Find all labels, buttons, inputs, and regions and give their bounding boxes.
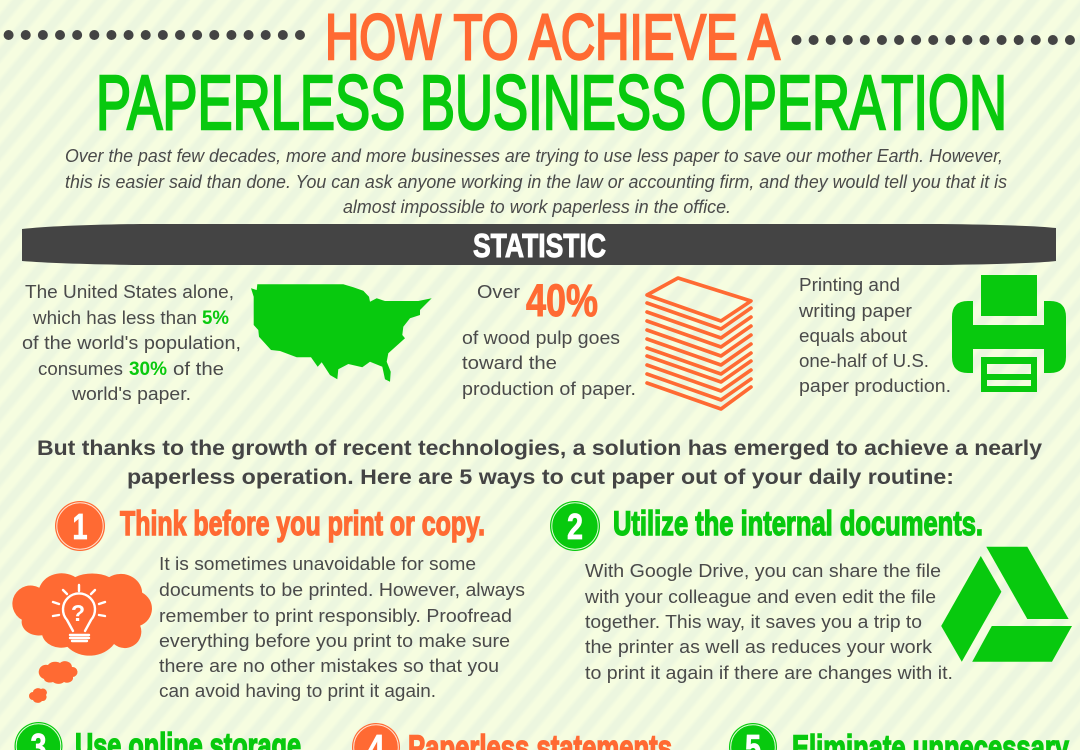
transition text <box>37 437 1042 489</box>
step 1 body: documents to be printed. However, always <box>159 579 525 600</box>
stat text: United States: 5% <box>202 308 229 329</box>
stat text: United States: world's paper. <box>71 383 191 404</box>
stat text: printing paper: equals about <box>799 325 907 346</box>
title line 1: HOW TO ACHIEVE A <box>325 1 780 73</box>
step 2 body: with your colleague and even edit the file <box>584 586 936 607</box>
stat text: United States: 30% <box>129 359 167 380</box>
step 1 badge: 1 <box>72 506 88 547</box>
left dotted line <box>9 30 300 40</box>
step 2 <box>550 501 1072 683</box>
step 1 body: remember to print responsibly. Proofread <box>159 605 512 626</box>
stat text: wood pulp: production of paper. <box>462 378 636 399</box>
step 2 body: With Google Drive, you can share the file <box>585 560 941 581</box>
step 1 body: everything before you print to make sure <box>159 630 510 651</box>
step 2 badge: 2 <box>567 506 583 547</box>
stat text: United States: The United States alone, <box>25 281 234 302</box>
icon: printer <box>952 275 1066 392</box>
icon: thought cloud with light bulb <box>12 573 152 703</box>
step 1 body: It is sometimes unavoidable for some <box>159 553 476 574</box>
stat text: wood pulp: toward the <box>462 352 557 373</box>
step 1 badge <box>55 501 105 551</box>
right dotted line <box>796 35 1070 45</box>
stat text: United States <box>22 281 241 404</box>
stat text: printing paper: writing paper <box>798 300 912 321</box>
intro text: Over the past few decades, more and more businesses are trying to use less paper to save our mother Earth. However, <box>65 145 1003 166</box>
step 4 <box>352 723 672 750</box>
stat text: printing paper: Printing and <box>799 274 900 295</box>
icon: paper stack <box>647 278 751 409</box>
stat text: wood pulp: of wood pulp goes <box>462 327 620 348</box>
step 2 body: together. This way, it saves you a trip to <box>585 611 922 632</box>
intro text: almost impossible to work paperless in the office. <box>343 196 731 217</box>
step 1 <box>12 501 525 703</box>
icon: USA map <box>251 284 432 382</box>
stat text: United States: of the world's population, <box>22 332 241 353</box>
step 4 badge <box>352 723 400 750</box>
step 3 badge <box>14 722 62 750</box>
title <box>96 1 1007 146</box>
icon: Google Drive logo <box>941 547 1072 662</box>
stat text: United States: consumes <box>38 358 123 379</box>
banner heading: STATISTIC <box>473 227 606 264</box>
step 2 body: the printer as well as reduces your work <box>585 636 933 657</box>
icon: thought cloud with light bulb: ? <box>71 600 85 626</box>
stat text: United States: of the <box>173 358 224 379</box>
intro text: this is easier said than done. You can ask anyone working in the law or accounting firm, and they would tell you that it is <box>65 171 1007 192</box>
transition text: But thanks to the growth of recent technologies, a solution has emerged to achieve a nearly <box>37 437 1042 460</box>
transition text: paperless operation. Here are 5 ways to cut paper out of your daily routine: <box>127 466 954 489</box>
step 3 <box>14 722 301 750</box>
statistic banner <box>22 224 1056 265</box>
stat text: wood pulp <box>462 275 636 399</box>
step 2 body: to print it again if there are changes with it. <box>585 662 953 683</box>
step 1 heading: Think before you print or copy. <box>120 505 485 543</box>
intro text <box>65 145 1007 217</box>
stat text: printing paper <box>798 274 951 396</box>
step 5 badge <box>729 723 777 750</box>
step 1 body: there are no other mistakes so that you <box>159 655 499 676</box>
step 2 body <box>584 560 953 683</box>
step 5 <box>729 723 1069 750</box>
step 1 body: can avoid having to print it again. <box>159 680 436 701</box>
40 percent figure: 40% <box>526 275 598 326</box>
step 2 badge <box>550 501 600 551</box>
step 1 body <box>159 553 525 701</box>
stat text: wood pulp: Over <box>477 281 520 302</box>
stat text: printing paper: one-half of U.S. <box>799 350 929 371</box>
stat text: printing paper: paper production. <box>799 375 951 396</box>
stat text: United States: which has less than <box>32 307 197 328</box>
